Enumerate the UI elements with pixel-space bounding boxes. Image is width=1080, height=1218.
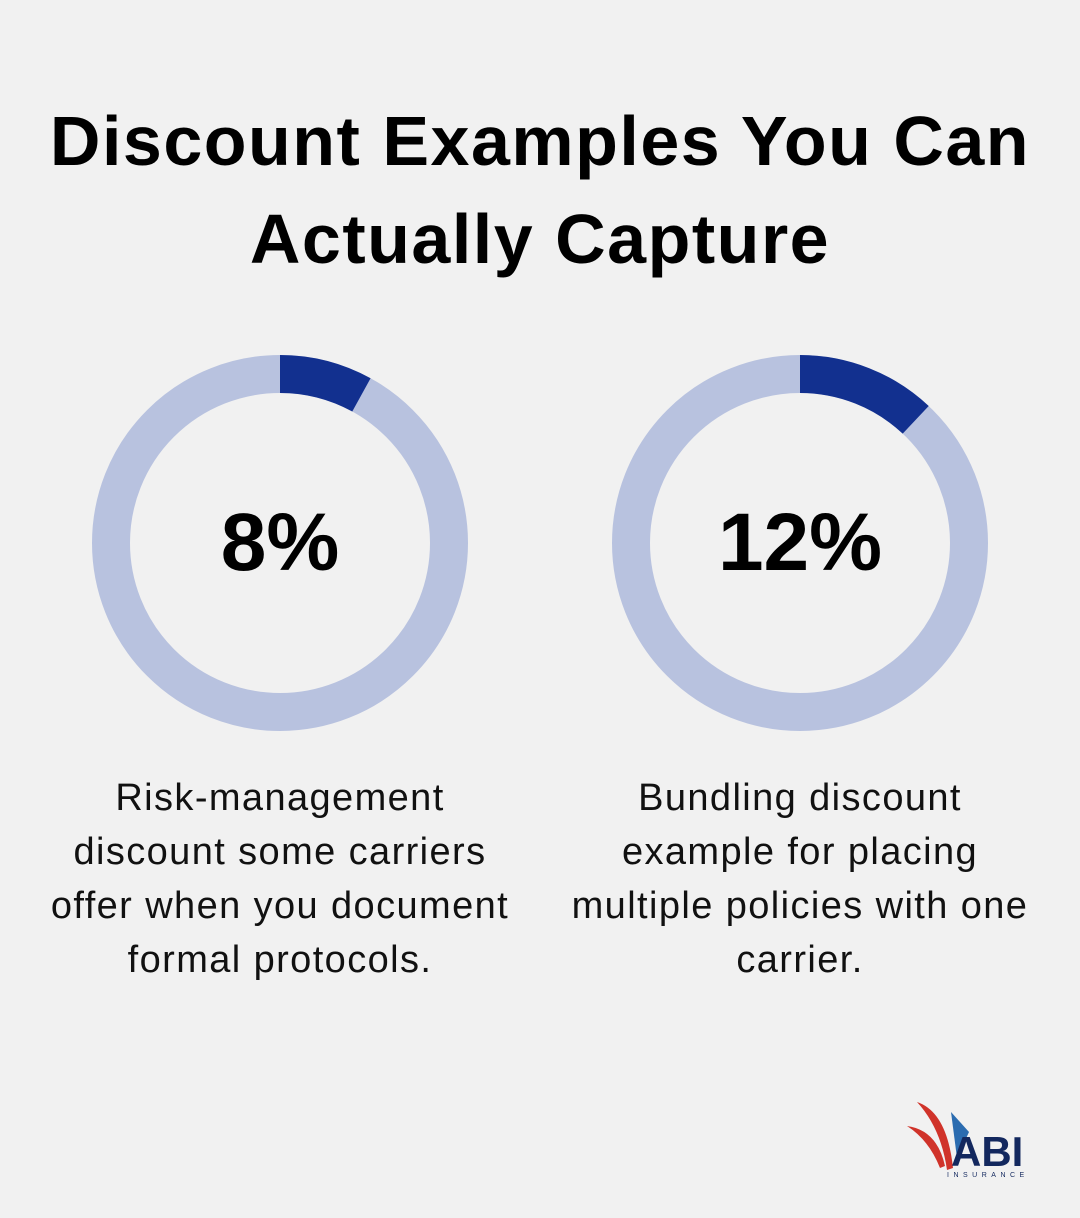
title: Actually Capture	[250, 200, 830, 278]
caption: right	[572, 777, 1028, 981]
title: Discount Examples You Can	[50, 102, 1030, 180]
logo: ABI Insurance	[907, 1102, 1029, 1178]
value: 8%: 8%	[221, 497, 339, 588]
value: 12%: 12%	[718, 497, 882, 588]
caption: left: discount some carriers	[73, 831, 487, 873]
logo: ABI Insurance: ABI	[951, 1128, 1023, 1175]
caption: right: Bundling discount	[638, 777, 962, 819]
caption: left: formal protocols.	[128, 939, 432, 981]
title	[50, 102, 1030, 278]
donut chart: 8%	[92, 355, 468, 731]
caption: right: example for placing	[622, 831, 978, 873]
caption: right: carrier.	[736, 939, 864, 981]
donut chart: 12%	[612, 355, 988, 731]
caption: right: multiple policies with one	[572, 885, 1028, 927]
caption: left: offer when you document	[51, 885, 509, 927]
caption: left	[51, 777, 509, 981]
caption: left: Risk-management	[115, 777, 445, 819]
